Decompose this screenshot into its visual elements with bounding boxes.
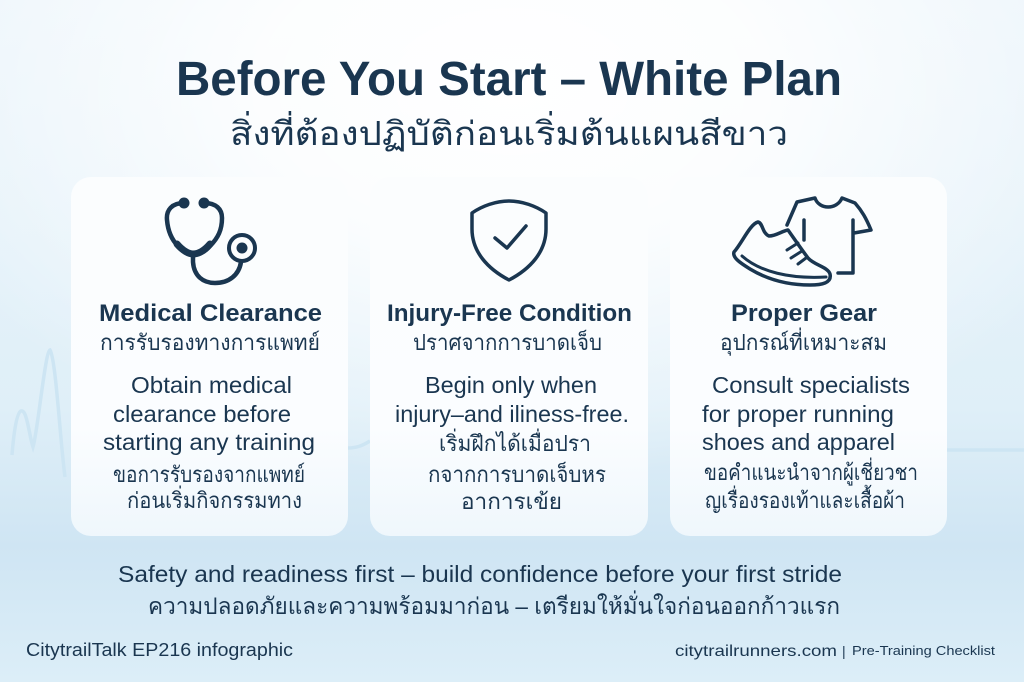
panel: injury-free condition: [370, 177, 648, 536]
thai heading: การรับรองทางการแพทย์: [100, 330, 320, 355]
body text: กจากการบาดเจ็บหร: [428, 460, 606, 487]
body text: ก่อนเริ่มกิจกรรมทาง: [127, 485, 302, 513]
panel: medical clearance: [71, 177, 348, 536]
icon: stethoscope: [167, 198, 255, 283]
body text: Obtain medical: [131, 372, 292, 398]
closing message: [118, 561, 842, 619]
closing message: ความปลอดภัยและความพร้อมมาก่อน – เตรียมให้มั่นใจก่อนออกก้าวแรก: [148, 590, 840, 619]
body text: starting any training: [103, 429, 315, 455]
footer: website: |: [842, 643, 846, 659]
title thai: สิ่งที่ต้องปฏิบัติก่อนเริ่มต้นแผนสีขาว: [230, 111, 788, 152]
title english: Before You Start – White Plan: [176, 53, 842, 106]
body text: อาการเข้ย: [461, 489, 562, 514]
body text: เริ่มฝึกได้เมื่อปรา: [439, 428, 591, 456]
body text: for proper running: [702, 401, 894, 427]
heading: injury-free: Injury-Free Condition: [387, 300, 632, 327]
body text: ญเรื่องรองเท้าและเสื้อผ้า: [705, 485, 905, 513]
footer: website: citytrailrunners.com: [675, 643, 837, 660]
thai heading: ปราศจากการบาดเจ็บ: [413, 328, 602, 355]
body text: clearance before: [113, 401, 291, 427]
thai heading: อุปกรณ์ที่เหมาะสม: [720, 327, 887, 356]
body text: ขอการรับรองจากแพทย์: [113, 462, 305, 487]
icon: shoe and shirt: [734, 198, 871, 285]
body text: [702, 372, 918, 513]
closing message: Safety and readiness first – build confidence before your first stride: [118, 561, 842, 587]
body text: [395, 372, 629, 514]
panel: proper gear: [670, 177, 947, 536]
body text: injury–and iliness-free.: [395, 401, 629, 427]
footer: website: [675, 643, 995, 660]
body text: Consult specialists: [712, 372, 910, 398]
body text: Begin only when: [425, 372, 597, 398]
icon: shield check: [472, 201, 546, 280]
heading: proper gear: Proper Gear: [731, 300, 877, 327]
heading: medical clearance: Medical Clearance: [99, 300, 322, 327]
background pulse line: [12, 350, 1024, 477]
footer: website: Pre-Training Checklist: [852, 643, 995, 658]
body text: shoes and apparel: [702, 429, 895, 455]
footer: source: CitytrailTalk EP216 infographic: [26, 640, 293, 660]
body text: [103, 372, 315, 513]
body text: ขอคำแนะนำจากผู้เชี่ยวชา: [704, 457, 918, 486]
